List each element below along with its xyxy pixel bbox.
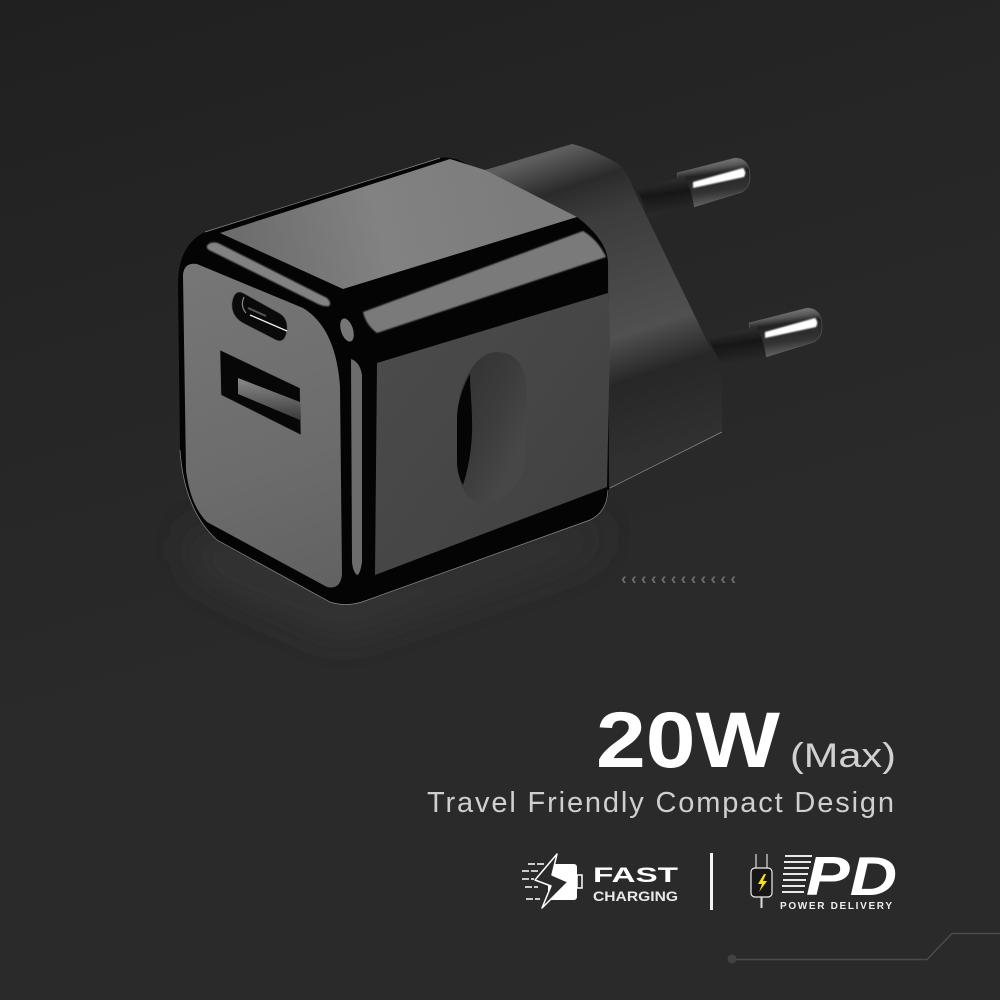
speed lines	[782, 856, 812, 892]
charger product image	[178, 144, 822, 630]
divider	[710, 853, 713, 910]
top face	[220, 159, 577, 289]
flange lower edge highlight	[610, 432, 722, 488]
label PD: PD	[806, 845, 897, 907]
USB-C port	[232, 292, 287, 341]
fast charging badge	[522, 854, 678, 908]
icon: battery with bolt	[522, 854, 582, 908]
subtitle: Travel Friendly Compact Design	[427, 787, 894, 819]
headline (Max): (Max)	[790, 737, 896, 775]
label CHARGING: CHARGING	[593, 888, 678, 904]
label FAST: FAST	[593, 864, 678, 887]
power delivery badge	[751, 845, 897, 912]
USB-A port	[220, 350, 301, 435]
bottom pin	[709, 308, 822, 367]
shell edge highlight	[180, 158, 608, 604]
front face	[183, 264, 342, 588]
side oval recess	[457, 352, 527, 503]
vertical edge highlight	[351, 359, 362, 575]
headline 20W: 20W	[596, 695, 780, 784]
label POWER DELIVERY: POWER DELIVERY	[780, 901, 892, 912]
side glossy streak	[363, 231, 606, 333]
circuit line	[728, 934, 1000, 964]
side face	[375, 293, 610, 575]
top pin	[637, 158, 750, 217]
body black shell	[178, 158, 609, 605]
decorative chevrons: ‹‹‹‹‹‹‹‹‹‹‹‹	[621, 569, 736, 588]
front glossy streak	[207, 242, 330, 306]
icon: cable with bolt	[751, 854, 772, 908]
corner highlight dot	[338, 317, 356, 343]
floor glow	[190, 525, 600, 630]
plug flange	[440, 144, 722, 488]
